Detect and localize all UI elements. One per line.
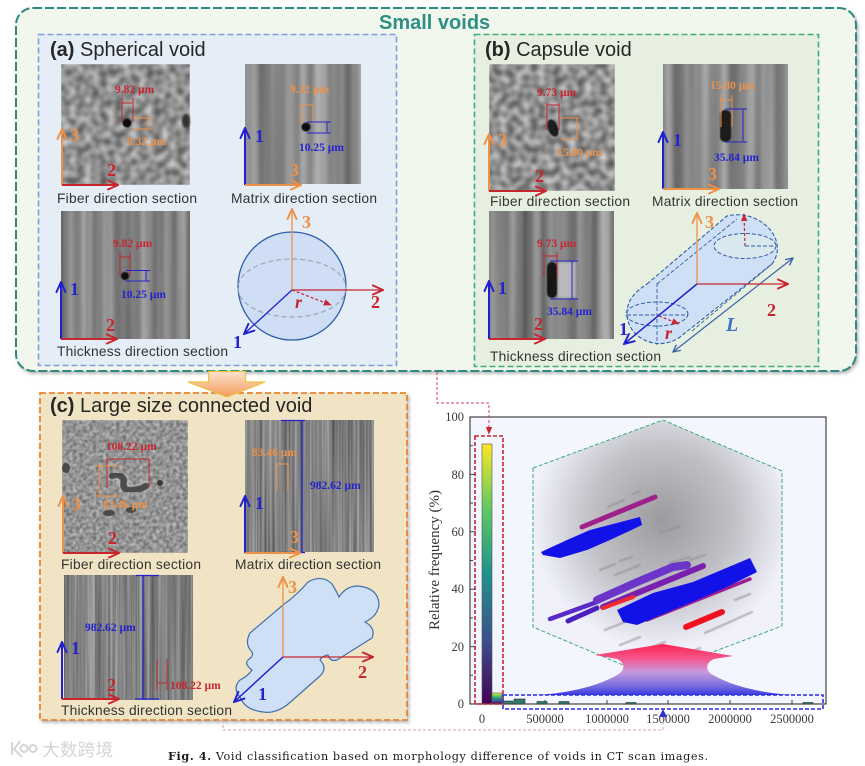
void: magenta under blue <box>647 579 750 620</box>
caption: thickness a: Thickness direction section <box>57 344 228 359</box>
image: matrix direction section b: 1 <box>673 130 682 150</box>
second bar <box>492 693 502 704</box>
diagram: capsule: L <box>725 314 738 336</box>
panel: (a) spherical void <box>38 34 396 366</box>
arrow: large void to histogram tail <box>223 709 667 730</box>
diagram: sphere: r <box>295 292 303 312</box>
figure caption: Fig. 4. Void classification based on morphology difference of voids in CT scan images. <box>168 749 708 763</box>
diagram: sphere <box>233 209 383 352</box>
image: fiber direction section c: 2 <box>108 528 117 548</box>
heading: small voids: Small voids <box>379 12 490 34</box>
image: thickness direction section b <box>489 211 614 339</box>
diagram: connected void blob: 2 <box>358 662 367 682</box>
image: matrix direction section c: 1 <box>255 493 264 513</box>
heading: (a): (a) Spherical void <box>50 39 206 61</box>
diagram: capsule: 3 <box>705 212 714 232</box>
image: fiber direction section c <box>62 420 188 553</box>
caption: fiber b: Fiber direction section <box>490 194 630 209</box>
x axis labels: 1500000 <box>646 712 690 726</box>
diagram: connected void blob: 1 <box>258 684 267 704</box>
y axis labels: 0 <box>458 697 464 711</box>
image: thickness direction section c <box>62 575 221 700</box>
image: thickness direction section b: 9.73 µm <box>537 238 577 250</box>
red dashed selection box <box>475 436 503 704</box>
caption: thickness b: Thickness direction section <box>490 349 661 364</box>
x axis labels: 0 <box>479 712 485 726</box>
caption: matrix a: Matrix direction section <box>231 191 377 206</box>
image: matrix direction section a: 3 <box>290 160 299 180</box>
image: matrix direction section b: 15.80 µm <box>710 80 755 92</box>
small bars <box>503 699 813 704</box>
diagram: sphere: 3 <box>302 212 311 232</box>
y axis labels <box>445 410 464 711</box>
caption: fiber a: Fiber direction section <box>57 191 197 206</box>
diagram: capsule: r <box>665 323 673 343</box>
arrow: small voids to large void <box>188 372 265 397</box>
diagram: connected void blob: 3 <box>288 577 297 597</box>
x axis labels: 1000000 <box>585 712 629 726</box>
image: fiber direction section a: 9.82 µm <box>115 84 155 96</box>
chart: relative frequency histogram <box>427 410 826 726</box>
y axis ticks <box>470 417 792 704</box>
image: thickness direction section b: 1 <box>498 278 507 298</box>
image: fiber direction section c: 83.46 µm <box>103 499 148 511</box>
caption: matrix c: Matrix direction section <box>235 557 381 572</box>
image: thickness direction section c: 2 <box>107 675 116 695</box>
diagram: capsule <box>619 212 793 352</box>
image: fiber direction section a: 2 <box>107 160 116 180</box>
image: thickness direction section a: 2 <box>106 315 115 335</box>
caption: fiber c: Fiber direction section <box>61 557 201 572</box>
y axis labels: 40 <box>452 582 464 596</box>
panel: (c) large size connected void <box>40 393 407 720</box>
image: matrix direction section b: 3 <box>708 164 717 184</box>
image: thickness direction section a: 10.25 µm <box>121 289 166 301</box>
image: matrix direction section b: 35.84 µm <box>714 152 759 164</box>
image: thickness direction section a: 9.82 µm <box>113 238 153 250</box>
image: fiber direction section b: 9.73 µm <box>537 87 577 99</box>
image: fiber direction section a: 9.32 µm <box>127 136 167 148</box>
image: matrix direction section a: 1 <box>255 126 264 146</box>
diagram: capsule: 1 <box>619 319 628 339</box>
y axis labels: 20 <box>452 640 464 654</box>
void: red streak <box>686 612 722 627</box>
image: thickness direction section c: 108.22 µm <box>170 680 221 692</box>
diagram: connected void blob <box>234 577 379 712</box>
void: magenta streak <box>582 497 655 527</box>
image: matrix direction section a: 10.25 µm <box>299 142 344 154</box>
panel: (b) capsule void <box>474 34 818 366</box>
void: violet streaks <box>550 565 703 621</box>
image: matrix direction section a <box>245 64 361 185</box>
main bar <box>482 444 492 704</box>
x axis labels: 500000 <box>526 712 564 726</box>
arrow: small voids to histogram peak <box>437 372 489 434</box>
blue dashed selection box <box>503 695 823 709</box>
x axis labels: 2500000 <box>770 712 814 726</box>
caption: thickness c: Thickness direction section <box>61 703 232 718</box>
caption: matrix b: Matrix direction section <box>652 194 798 209</box>
x axis labels: 2000000 <box>708 712 752 726</box>
image: thickness direction section b: 35.84 µm <box>547 306 592 318</box>
heading: (b): (b) Capsule void <box>485 39 632 61</box>
image: thickness direction section a: 1 <box>70 279 79 299</box>
diagram: sphere: 2 <box>371 292 380 312</box>
y axis labels: 60 <box>452 525 464 539</box>
image: matrix direction section c: 3 <box>290 527 299 547</box>
watermark: 大数跨境 <box>42 740 113 760</box>
image: fiber direction section b: 15.80 µm <box>557 147 602 159</box>
y axis labels: 100 <box>445 410 464 424</box>
void: upper blue cluster <box>541 517 642 558</box>
void: large blue cluster <box>617 558 757 625</box>
image: matrix direction section c: 982.62 µm <box>310 480 361 492</box>
image: fiber direction section b: 2 <box>535 166 544 186</box>
diagram: capsule: 2 <box>767 300 776 320</box>
image: thickness direction section c: 1 <box>71 638 80 658</box>
image: fiber direction section c: 3 <box>72 494 81 514</box>
x axis labels <box>479 712 814 726</box>
image: fiber direction section a <box>61 64 190 185</box>
bell-shaped link from inset to histogram <box>537 644 793 695</box>
diagram: sphere: 1 <box>233 332 242 352</box>
image: thickness direction section c: 982.62 µm <box>85 622 136 634</box>
inset: CT scan void hexagon <box>533 420 782 676</box>
heading: (c): (c) Large size connected void <box>50 395 312 417</box>
image: matrix direction section a: 9.32 µm <box>290 84 330 96</box>
y axis title: Relative frequency (%) <box>427 490 443 630</box>
image: matrix direction section c <box>245 420 374 553</box>
image: fiber direction section b: 3 <box>498 130 507 150</box>
image: matrix direction section c: 83.46 µm <box>252 447 297 459</box>
image: thickness direction section b: 2 <box>534 314 543 334</box>
image: fiber direction section c: 108.22 µm <box>106 441 157 453</box>
image: fiber direction section a: 3 <box>70 125 79 145</box>
image: thickness direction section a <box>61 211 190 339</box>
y axis labels: 80 <box>452 468 464 482</box>
image: fiber direction section b <box>489 64 615 191</box>
image: matrix direction section b <box>663 64 788 189</box>
